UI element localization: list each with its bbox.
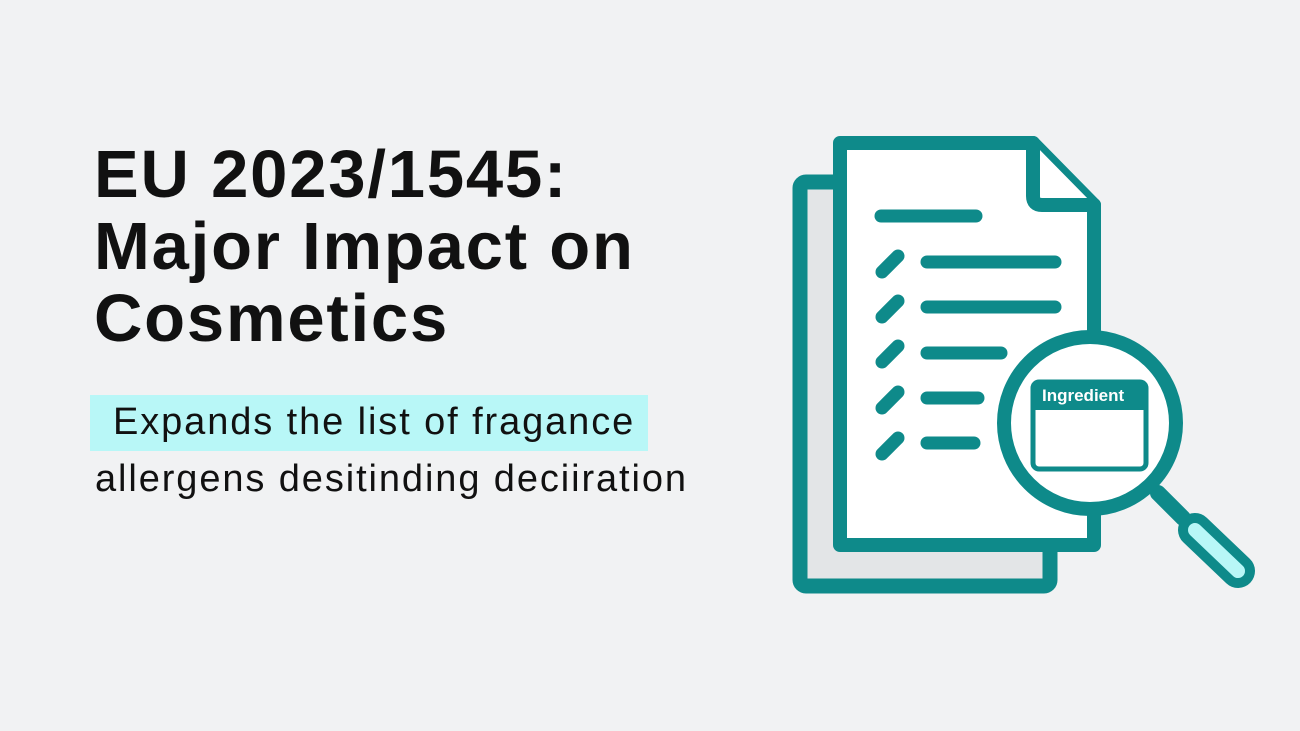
icon: document with magnifier: Ingredient <box>1042 386 1125 405</box>
magnifier lens <box>1004 337 1176 509</box>
subtitle line 1: Expands the list of fragance <box>113 401 635 443</box>
front page <box>840 143 1094 545</box>
highlighted subtitle <box>90 395 648 451</box>
title: Cosmetics <box>94 281 449 356</box>
title: EU 2023/1545: <box>94 137 568 212</box>
magnifier handle <box>1158 493 1183 518</box>
back page <box>800 182 1050 586</box>
title: Major Impact on <box>94 209 635 284</box>
title <box>94 137 635 356</box>
list lines <box>881 216 1055 454</box>
ingredient box <box>1033 382 1146 469</box>
subtitle line 2: allergens desitinding deciiration <box>95 458 688 500</box>
